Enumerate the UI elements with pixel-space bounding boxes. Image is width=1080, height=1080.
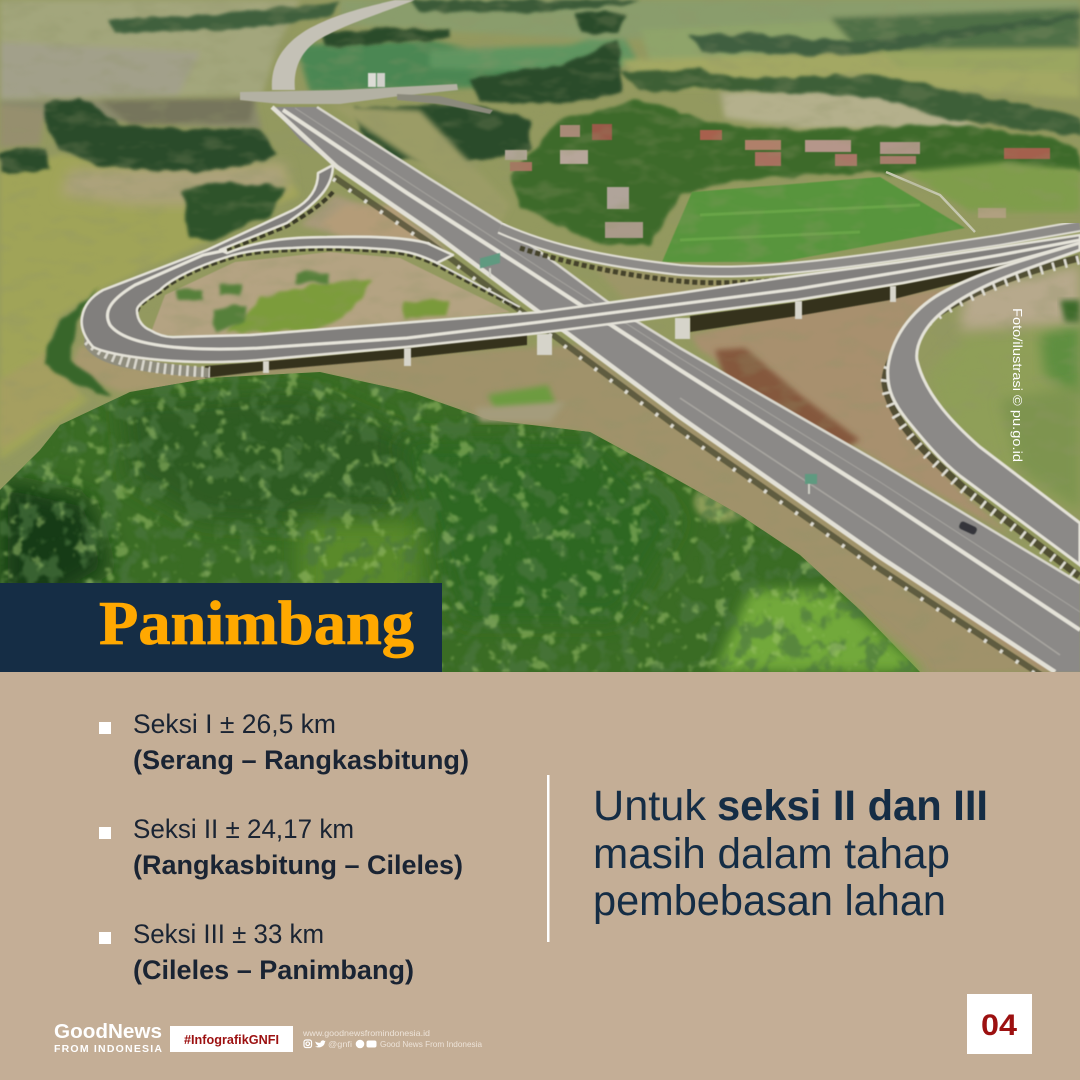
right loop field — [928, 322, 1080, 515]
approach road north — [272, 0, 415, 90]
page number — [967, 994, 1032, 1054]
section 3: Seksi III ± 33 km — [133, 919, 324, 949]
website and social handles: Good News From Indonesia — [380, 1039, 482, 1049]
right curve ramp — [885, 243, 1080, 578]
icon: twitter — [315, 1040, 326, 1047]
section list — [99, 709, 469, 985]
fence under loop — [84, 192, 520, 378]
small green patches — [488, 385, 556, 410]
dark tree lines — [0, 0, 1080, 240]
hashtag badge: #InfografikGNFI — [184, 1032, 279, 1047]
icon: facebook — [356, 1040, 364, 1048]
section 2: Seksi II ± 24,17 km — [133, 814, 354, 844]
website and social handles: www.goodnewsfromindonesia.id — [302, 1028, 430, 1038]
cloverleaf overpass and ramps — [82, 165, 1080, 362]
section 2: (Rangkasbitung – Cileles) — [133, 850, 463, 880]
title banner — [0, 583, 442, 672]
fringe of bushes along the loop — [45, 285, 112, 395]
status statement: seksi II dan III — [717, 782, 988, 830]
road signs and vehicles — [480, 253, 978, 535]
shadow beneath overpass — [205, 262, 1010, 378]
loop interior ground — [150, 252, 510, 338]
upper ramp — [500, 226, 1080, 283]
icon: instagram — [304, 1040, 312, 1048]
footer logo — [54, 1020, 162, 1055]
excavated soil strip — [715, 348, 860, 450]
vertical divider — [547, 775, 550, 942]
section 3: (Cileles – Panimbang) — [133, 955, 414, 985]
village trees — [510, 100, 1080, 245]
forest — [0, 360, 940, 672]
main highway — [272, 107, 1080, 679]
dirt areas around interchange — [70, 105, 1040, 672]
cross road bridge — [240, 73, 493, 114]
section 1: Seksi I ± 26,5 km — [133, 709, 336, 739]
green rice field — [662, 177, 965, 262]
bridge piers — [263, 286, 896, 373]
photo credit: Foto/ilustrasi © pu.go.id — [1010, 308, 1025, 462]
hashtag badge — [170, 1026, 293, 1052]
highway surface — [272, 107, 1080, 672]
section 1 — [99, 709, 469, 775]
section 3 — [99, 919, 414, 985]
highway shadow and fence — [334, 177, 1044, 677]
far fields — [0, 0, 1080, 148]
title text: Panimbang — [99, 590, 414, 658]
status statement: pembebasan lahan — [593, 877, 946, 925]
status statement: Untuk — [593, 782, 706, 830]
left rice field — [0, 155, 300, 460]
status statement — [593, 782, 988, 925]
photo: aerial view of the toll road interchange — [0, 0, 1080, 679]
section 2 — [99, 814, 463, 880]
page number: 04 — [981, 1009, 1017, 1042]
footer logo: GoodNews — [54, 1020, 162, 1043]
status statement: masih dalam tahap — [593, 830, 950, 878]
website and social handles — [302, 1028, 482, 1049]
village rooftops — [505, 124, 1050, 238]
near ground strip by the highway — [906, 577, 1050, 672]
icon: youtube — [366, 1040, 376, 1048]
footer logo: FROM INDONESIA — [54, 1043, 162, 1055]
website and social handles: @gnfi — [328, 1039, 352, 1049]
section 1: (Serang – Rangkasbitung) — [133, 745, 469, 775]
